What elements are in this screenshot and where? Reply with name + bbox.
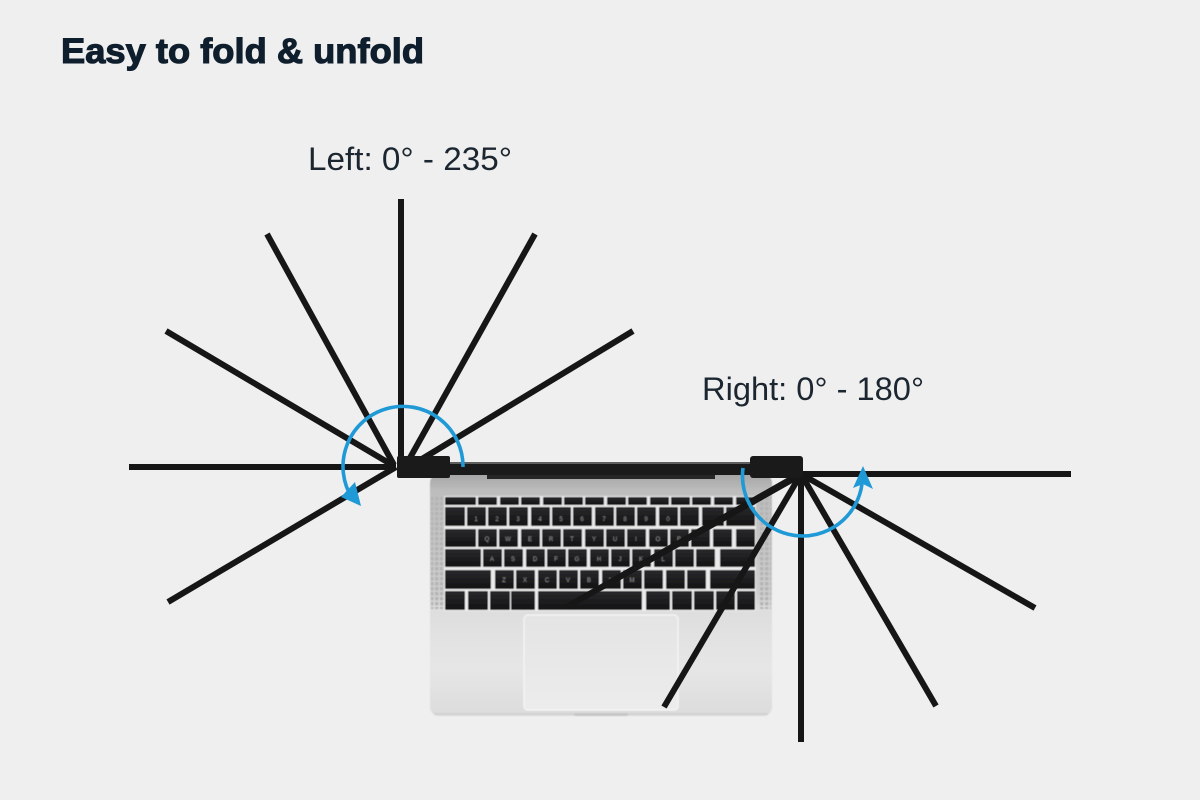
key legends: G <box>575 557 580 563</box>
key legends: 9 <box>644 517 648 523</box>
key legends: F <box>554 557 558 563</box>
key legends: S <box>511 557 515 563</box>
key legends: 8 <box>623 517 627 523</box>
key legends: 6 <box>580 517 584 523</box>
trackpad <box>524 615 678 710</box>
speaker grille left <box>431 497 443 609</box>
right rotation arrow <box>742 466 873 536</box>
key legends: W <box>505 537 511 543</box>
label: right rotation range: Right: 0° - 180° <box>702 371 924 407</box>
label: left rotation range: Left: 0° - 235° <box>308 141 512 177</box>
key legends: R <box>549 537 554 543</box>
key legends: E <box>528 537 532 543</box>
key legends: L <box>661 557 665 563</box>
key legends: Y <box>592 537 596 543</box>
key legends: M <box>630 578 634 584</box>
key legends: 4 <box>538 517 542 523</box>
key legends: Q <box>485 537 490 543</box>
laptop base <box>430 474 772 716</box>
right hinge block <box>750 456 803 478</box>
key legends: N <box>609 578 613 584</box>
title: Easy to fold & unfold <box>61 32 424 71</box>
key legends: Z <box>502 578 506 584</box>
key legends: 1 <box>474 517 478 523</box>
speaker grille right <box>759 497 771 609</box>
key legends: K <box>639 557 643 563</box>
key legends: D <box>533 557 538 563</box>
key legends: 0 <box>666 517 670 523</box>
key legends: 2 <box>495 517 499 523</box>
left hinge block <box>397 456 450 478</box>
left rotation arrow <box>341 406 463 506</box>
screen edge folded flat against hinge <box>450 462 750 479</box>
key legends: 7 <box>602 517 606 523</box>
left screen positions <box>129 199 633 602</box>
key legends: 5 <box>559 517 563 523</box>
key legends: O <box>656 537 661 543</box>
key legends: T <box>570 537 574 543</box>
key legends: I <box>635 537 637 543</box>
key legends: C <box>545 578 550 584</box>
key legends: V <box>566 578 570 584</box>
key legends: X <box>523 578 527 584</box>
key legends: J <box>618 557 622 563</box>
key legends: P <box>677 537 681 543</box>
key legends: B <box>587 578 591 584</box>
key legends <box>474 517 681 584</box>
key legends: A <box>490 557 494 563</box>
right screen positions <box>564 471 1071 742</box>
key legends: U <box>613 537 617 543</box>
keyboard <box>444 496 756 611</box>
key legends: H <box>597 557 601 563</box>
key legends: 3 <box>516 517 520 523</box>
